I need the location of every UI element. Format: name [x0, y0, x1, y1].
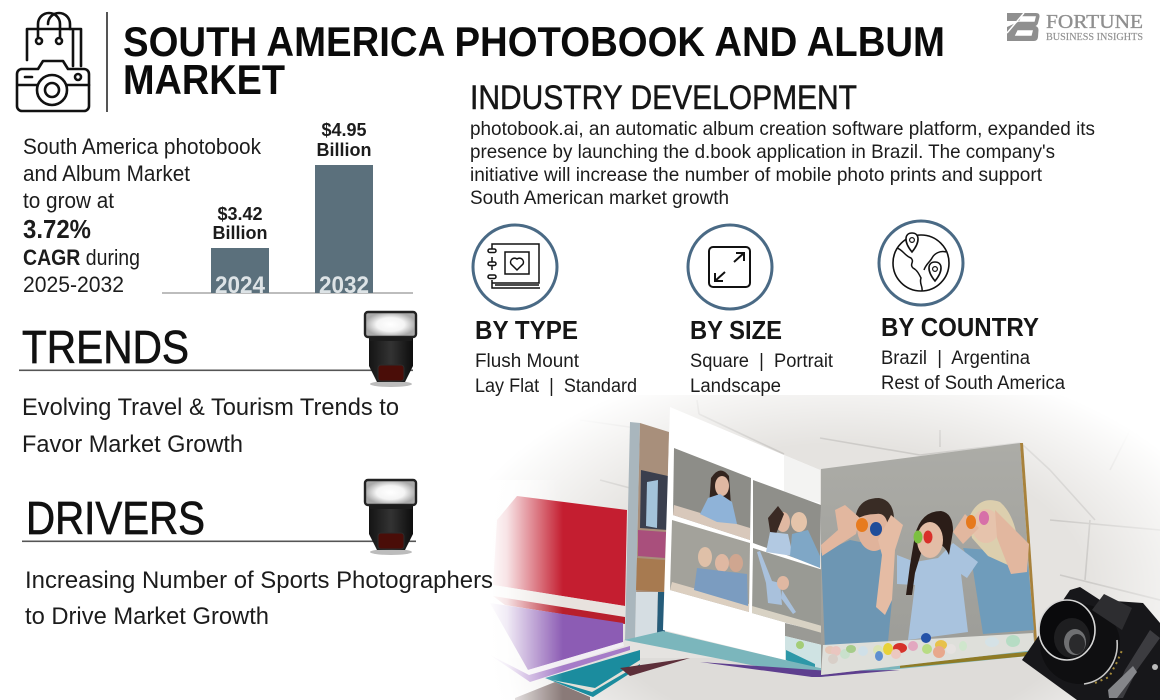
- by size list: Landscape: [690, 376, 781, 397]
- by type list: Flush Mount: [475, 351, 580, 372]
- industry development paragraph: South American market growth: [470, 187, 729, 209]
- panel: drivers: [22, 480, 493, 630]
- panel: industry development: [470, 79, 1095, 209]
- vintage camera: [1022, 587, 1160, 700]
- icon: globe with map pins: [879, 221, 963, 305]
- collage photo: girl dancing: [752, 548, 823, 633]
- book base edge: [624, 631, 1038, 677]
- person right: blonde woman: [953, 500, 1034, 634]
- text block: CAGR summary: to grow at: [23, 188, 114, 213]
- title: SOUTH AMERICA PHOTOBOOK AND ALBUM: [123, 18, 945, 65]
- collage photo: mother and daughter: [753, 480, 821, 568]
- segment: by country: [879, 221, 1065, 394]
- segment: by type: BY TYPE: [475, 315, 578, 345]
- bar chart: market size 2024 vs 2032: [162, 120, 413, 299]
- segment: by country: BY COUNTRY: [881, 312, 1039, 342]
- icon: camera flash: [365, 312, 416, 387]
- collage photo: girl: [673, 448, 751, 540]
- collage photo: family of three: [670, 520, 750, 612]
- by country list: Brazil | Argentina: [881, 348, 1030, 369]
- text block: CAGR summary: and Album Market: [23, 161, 190, 186]
- by type list: [475, 351, 637, 397]
- icon: photo album: [473, 225, 557, 309]
- bar 2032: $4.95: [321, 120, 367, 140]
- trends text: Evolving Travel & Tourism Trends to: [22, 394, 399, 421]
- bar 2024: [211, 204, 269, 299]
- by country list: Rest of South America: [881, 373, 1065, 394]
- by size list: [690, 351, 834, 397]
- person left: man: [821, 498, 903, 650]
- by size list: Square | Portrait: [690, 351, 834, 372]
- brick wall and floor: [488, 395, 1160, 700]
- logo: Fortune Business Insights: BUSINESS INSIGHTS: [1046, 32, 1143, 43]
- text block: CAGR summary: 2025-2032: [23, 272, 124, 297]
- logo: Fortune Business Insights: FORTUNE: [1046, 11, 1143, 33]
- bar 2024: $3.42: [217, 204, 263, 224]
- by country list: [881, 348, 1065, 394]
- industry development paragraph: photobook.ai, an automatic album creation software platform, expanded its: [470, 118, 1095, 140]
- bar 2032: Billion: [316, 140, 372, 160]
- drivers text: [25, 567, 493, 630]
- photo: open photobook on a brick wall: [488, 395, 1160, 700]
- bar 2024: 2024: [215, 272, 266, 299]
- text block: CAGR summary: CAGR during: [23, 245, 140, 270]
- left fade over books: [488, 480, 563, 700]
- photobook back cover with travel photo: [625, 422, 669, 640]
- segment: by size: BY SIZE: [690, 315, 782, 345]
- drivers text: Increasing Number of Sports Photographers: [25, 567, 493, 594]
- segment: by size: [688, 225, 834, 397]
- trends text: Favor Market Growth: [22, 431, 243, 458]
- header divider: [106, 12, 108, 112]
- teal book: [515, 650, 690, 700]
- title: [123, 18, 945, 103]
- lower inner page: [785, 623, 822, 645]
- text block: CAGR summary: South America photobook: [23, 134, 262, 159]
- logo: Fortune Business Insights: [1007, 11, 1143, 43]
- text block: CAGR summary: 3.72%: [23, 214, 91, 244]
- title: MARKET: [123, 56, 285, 103]
- segment: by type: [473, 225, 637, 397]
- red book: [493, 496, 627, 624]
- bar 2032: [315, 120, 373, 299]
- panel: trends: [19, 312, 416, 458]
- person middle: child: [897, 511, 978, 640]
- icon: camera flash: [365, 480, 416, 555]
- trends heading: TRENDS: [22, 321, 189, 373]
- bar 2032: 2032: [319, 272, 369, 299]
- industry development paragraph: presence by launching the d.book application in Brazil. The company's: [470, 141, 1055, 163]
- drivers heading: DRIVERS: [26, 492, 205, 544]
- bar 2024: Billion: [212, 223, 268, 243]
- drivers text: to Drive Market Growth: [25, 603, 269, 630]
- table with eggs: [821, 633, 1035, 675]
- by type list: Lay Flat | Standard: [475, 376, 637, 397]
- industry development heading: INDUSTRY DEVELOPMENT: [470, 79, 857, 117]
- purple book: [490, 603, 630, 682]
- right page: family with eggs: [821, 443, 1038, 675]
- icon: resize arrows: [688, 225, 772, 309]
- left page: white sheet with photo collage: [663, 407, 823, 675]
- header icon: shopping bag with camera: [17, 13, 89, 111]
- text block: CAGR summary: [23, 134, 262, 297]
- industry development paragraph: initiative will increase the number of mobile photo prints and support: [470, 164, 1043, 186]
- trends text: [22, 394, 399, 458]
- industry development paragraph: [470, 118, 1095, 209]
